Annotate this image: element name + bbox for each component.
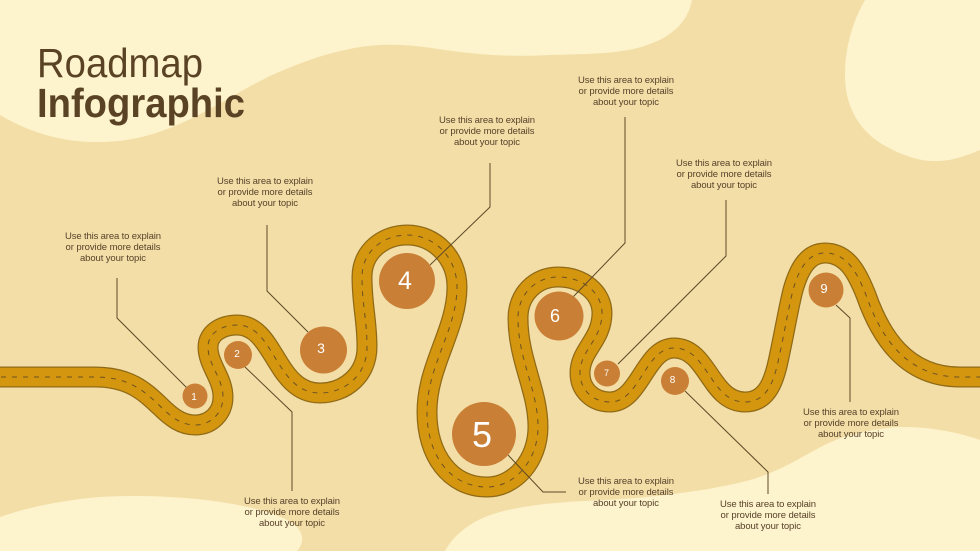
text block 6 bbox=[578, 75, 674, 108]
milestone 6: 6 bbox=[550, 306, 560, 326]
text block 8 bbox=[720, 499, 816, 532]
milestone 4 bbox=[379, 253, 435, 309]
text block 7: Use this area to explain bbox=[676, 158, 772, 169]
text block 1: or provide more details bbox=[66, 242, 161, 253]
connector lines bbox=[117, 117, 850, 494]
milestone 3: 3 bbox=[317, 340, 325, 356]
milestone 1 bbox=[182, 384, 208, 408]
text block 4: about your topic bbox=[454, 137, 520, 148]
milestone 2: 2 bbox=[234, 349, 240, 360]
text block 8: about your topic bbox=[735, 521, 801, 532]
text block 6: about your topic bbox=[593, 97, 659, 108]
text block 6: Use this area to explain bbox=[578, 75, 674, 86]
text block 7: about your topic bbox=[691, 180, 757, 191]
background blob: top right bbox=[845, 0, 980, 161]
background blob: bottom left bbox=[0, 496, 302, 551]
text block 4: or provide more details bbox=[440, 126, 535, 137]
text block 2 bbox=[244, 496, 340, 529]
milestone 1: 1 bbox=[191, 392, 197, 403]
text block 9: or provide more details bbox=[804, 418, 899, 429]
milestone 9: 9 bbox=[820, 281, 828, 296]
milestone 8: 8 bbox=[670, 375, 676, 386]
milestone 2 bbox=[224, 341, 252, 369]
text block 3: Use this area to explain bbox=[217, 176, 313, 187]
text block 7: or provide more details bbox=[676, 169, 772, 180]
milestone 4: 4 bbox=[398, 267, 412, 295]
milestone 7: 7 bbox=[604, 368, 609, 378]
milestone 6 bbox=[534, 292, 584, 340]
text block 9 bbox=[803, 407, 899, 440]
background blob: top bbox=[0, 0, 692, 142]
text block 2: Use this area to explain bbox=[244, 496, 340, 507]
text block 1: about your topic bbox=[80, 253, 146, 264]
text block 3: about your topic bbox=[232, 198, 298, 209]
milestone 9 bbox=[808, 272, 844, 308]
milestone 8 bbox=[661, 367, 689, 395]
winding road bbox=[0, 235, 980, 487]
text block 4 bbox=[439, 115, 535, 148]
text block 6: or provide more details bbox=[578, 86, 674, 97]
text block 5: about your topic bbox=[593, 498, 659, 509]
text block 5: Use this area to explain bbox=[578, 476, 674, 487]
title: Roadmap bbox=[37, 40, 203, 86]
background blob: bottom right bbox=[445, 427, 980, 551]
text block 8: Use this area to explain bbox=[720, 499, 816, 510]
text block 5: or provide more details bbox=[578, 487, 674, 498]
text block 2: or provide more details bbox=[244, 507, 340, 518]
text block 5 bbox=[578, 476, 674, 509]
milestone 5: 5 bbox=[472, 414, 492, 455]
title: Infographic bbox=[37, 80, 245, 126]
text block 4: Use this area to explain bbox=[439, 115, 535, 126]
text block 9: Use this area to explain bbox=[803, 407, 899, 418]
text block 9: about your topic bbox=[818, 429, 884, 440]
milestone 5 bbox=[452, 402, 516, 466]
text block 2: about your topic bbox=[259, 518, 325, 529]
text block 1: Use this area to explain bbox=[65, 231, 161, 242]
text block 3: or provide more details bbox=[218, 187, 313, 198]
text block 8: or provide more details bbox=[720, 510, 816, 521]
title bbox=[37, 40, 245, 126]
text block 1 bbox=[65, 231, 161, 264]
milestone 7 bbox=[594, 360, 620, 386]
milestone 3 bbox=[300, 326, 347, 374]
text block 3 bbox=[217, 176, 313, 209]
text block 7 bbox=[676, 158, 772, 191]
